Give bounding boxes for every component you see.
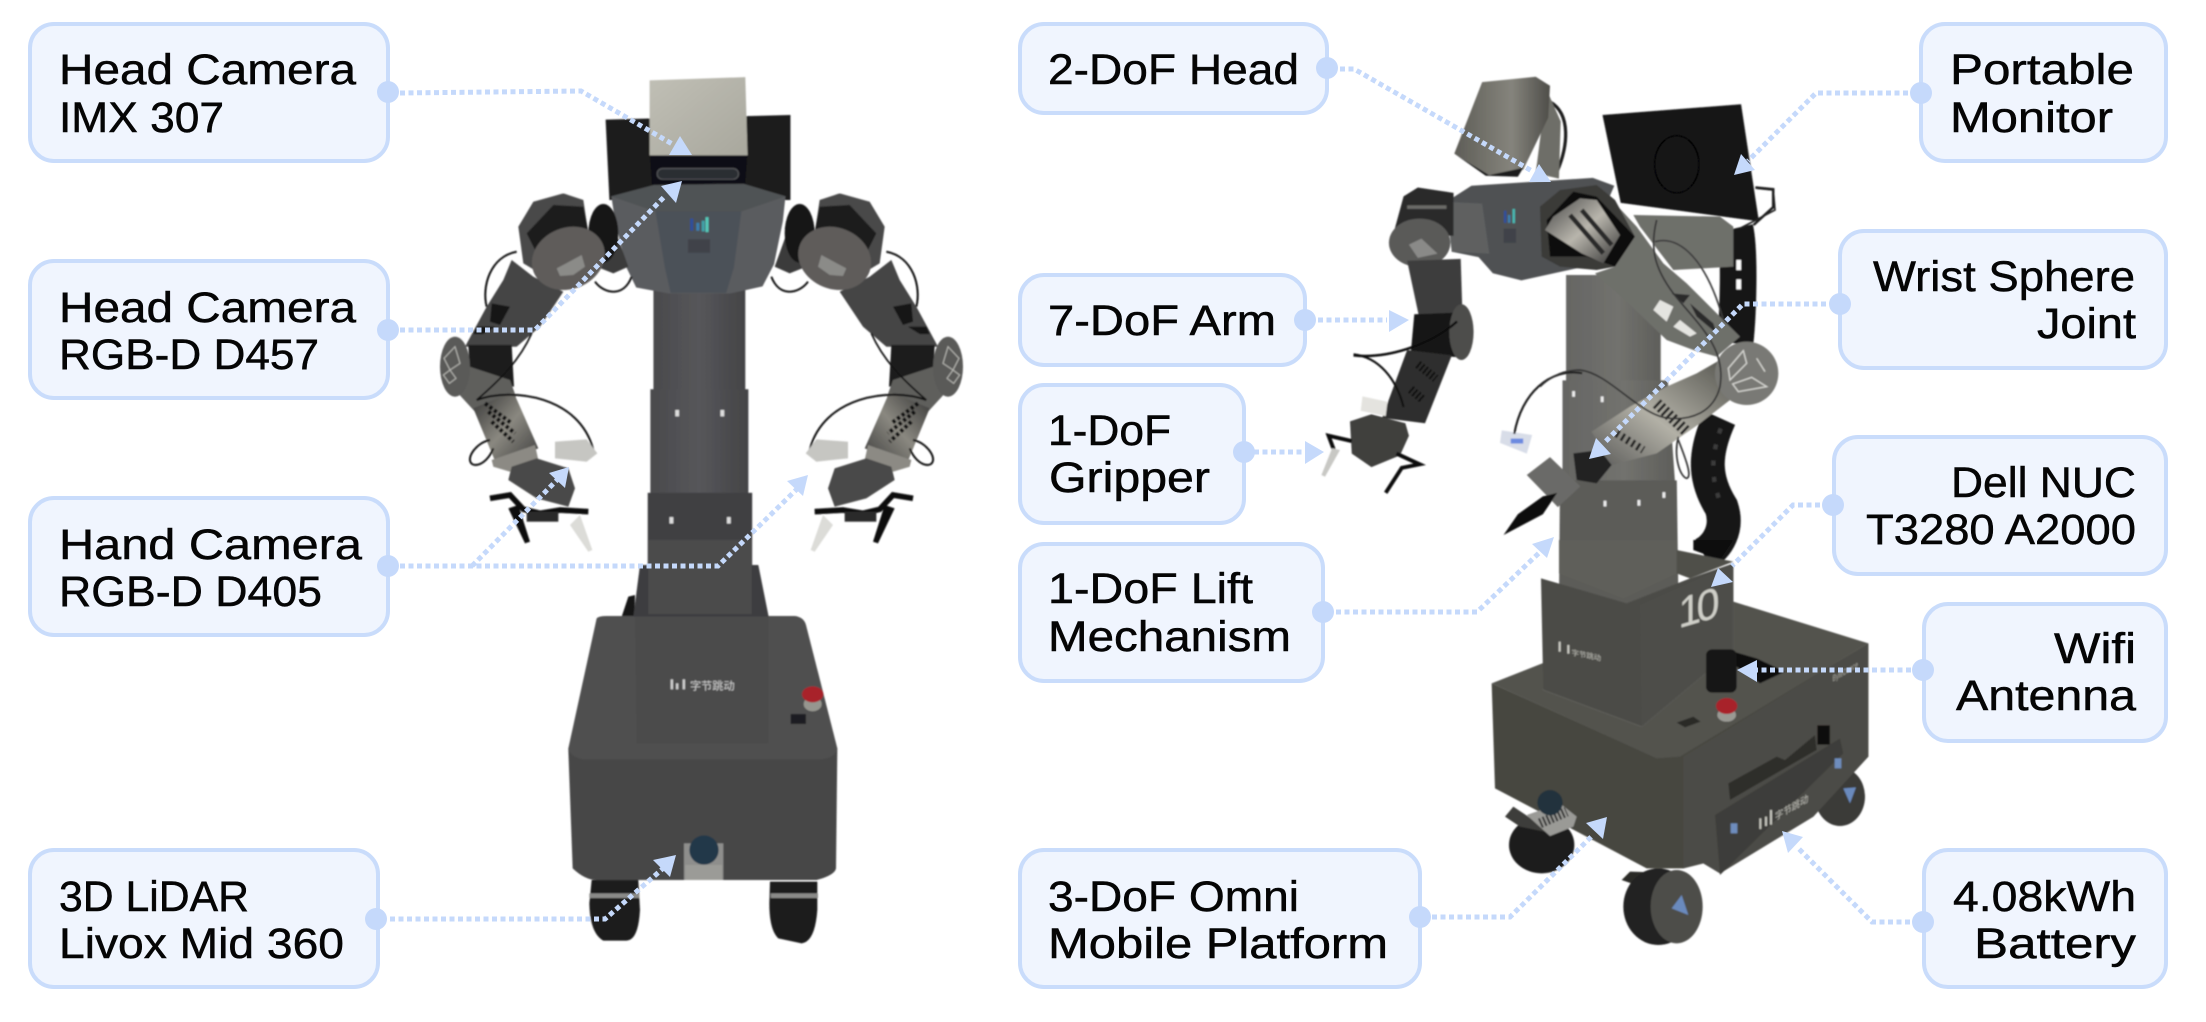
- label: Head Camera IMX 307: IMX 307: [59, 94, 224, 142]
- connector: Portable Monitor: [1734, 93, 1908, 175]
- robot: front view: [440, 77, 963, 943]
- connector: Hand Camera RGB-D D405: [400, 467, 808, 566]
- tower: 字节跳动: [1572, 648, 1601, 663]
- gripper jaws: [490, 495, 588, 513]
- label: 3-DoF Omni Mobile Platform: Mobile Platform: [1048, 920, 1388, 968]
- connector: Battery: [1782, 831, 1910, 922]
- arm cables: [1540, 188, 1775, 478]
- tower: [1541, 540, 1733, 727]
- head camera housing: [650, 77, 748, 187]
- gripper body: [508, 458, 575, 507]
- label: 7-DoF Arm: [1020, 275, 1316, 365]
- connector: 3-DoF Omni: [1432, 817, 1607, 917]
- label: 4.08kWh Battery: 4.08kWh: [1953, 873, 2136, 921]
- label: Head Camera IMX 307: [30, 24, 399, 161]
- tower: 10: [1678, 578, 1719, 638]
- front view base: [568, 540, 837, 943]
- connector: 3D LiDAR: [390, 855, 676, 919]
- label: Wrist Sphere Joint: Joint: [2037, 300, 2136, 348]
- connector: 2-DoF Head: [1340, 69, 1551, 182]
- left wheel and LiDAR: [1505, 790, 1577, 873]
- connector: Head Camera RGB-D D457: [400, 181, 682, 330]
- label: Portable Monitor: [1910, 24, 2166, 161]
- chain: [1693, 540, 1733, 560]
- battery: [1715, 738, 1843, 875]
- e-stop: [791, 686, 823, 724]
- label: 2-DoF Head: 2-DoF Head: [1048, 46, 1299, 94]
- label: Hand Camera RGB-D D405: Hand Camera: [59, 521, 362, 569]
- label: Dell NUC T3280 A2000: T3280 A2000: [1866, 506, 2136, 554]
- robot: three-quarter view: [1321, 77, 1868, 945]
- label: 1-DoF Lift Mechanism: Mechanism: [1048, 613, 1291, 661]
- label: 3-DoF Omni Mobile Platform: 3-DoF Omni: [1048, 873, 1299, 921]
- label: 1-DoF Lift Mechanism: [1020, 544, 1334, 681]
- label: Head Camera RGB-D D457: [30, 261, 399, 398]
- three-quarter upper body: [1321, 77, 1773, 610]
- lift column: [648, 286, 752, 610]
- rear wheel: [1815, 767, 1865, 826]
- label: 4.08kWh Battery: Battery: [1974, 920, 2137, 968]
- label: Portable Monitor: Monitor: [1950, 94, 2113, 142]
- label: 1-DoF Lift Mechanism: 1-DoF Lift: [1048, 565, 1253, 613]
- lift column: [1559, 275, 1679, 610]
- connector: 1-DoF Gripper: [1254, 441, 1324, 464]
- label: 1-DoF Gripper: [1020, 385, 1255, 523]
- far arm: [1321, 187, 1474, 493]
- battery: 字节跳动: [1775, 792, 1808, 824]
- connector: Dell NUC: [1711, 505, 1820, 587]
- left arm: [440, 193, 632, 552]
- label: 1-DoF Gripper: 1-DoF: [1048, 407, 1171, 455]
- monitor back: [606, 115, 790, 200]
- logo: 字节跳动: [690, 678, 735, 692]
- forearm: [1592, 360, 1730, 465]
- rear wheels: [589, 880, 818, 943]
- connector: 7-DoF Arm: [1318, 310, 1409, 332]
- near arm: [1540, 185, 1778, 483]
- monitor: [1602, 104, 1773, 225]
- label: 7-DoF Arm: 7-DoF Arm: [1048, 297, 1276, 345]
- label: 3D LiDAR Livox Mid 360: [30, 850, 387, 987]
- label: Hand Camera RGB-D D405: [30, 498, 399, 635]
- shoulder drum: [1540, 185, 1635, 270]
- lower cable chain: [1704, 418, 1724, 554]
- forearm: [473, 392, 538, 465]
- base body: [1492, 643, 1868, 873]
- upper arm: [465, 260, 563, 347]
- label: Hand Camera RGB-D D405: RGB-D D405: [59, 568, 322, 616]
- hand camera: [555, 439, 597, 462]
- connector: Wifi Antenna: [1737, 660, 1911, 682]
- right arm: [771, 193, 963, 552]
- connector: 1-DoF Lift: [1336, 537, 1554, 612]
- label: Head Camera RGB-D D457: Head Camera: [59, 284, 356, 332]
- wrist sphere joint: [1715, 342, 1778, 405]
- connector: Head Camera IMX 307: [400, 91, 692, 155]
- base body: [568, 748, 837, 880]
- label: Portable Monitor: Portable: [1950, 46, 2134, 94]
- LiDAR: [684, 835, 723, 880]
- brand label: ByteDance: [1833, 659, 1858, 684]
- front view upper body: [606, 77, 790, 610]
- head: [1454, 77, 1566, 179]
- vent and antenna: [1706, 649, 1785, 693]
- e-stop: [1677, 698, 1737, 727]
- connector: Wrist Sphere Joint: [1589, 304, 1826, 459]
- upper arm link: [1595, 187, 1740, 357]
- logo: [671, 678, 735, 692]
- label: 1-DoF Gripper: Gripper: [1049, 454, 1210, 502]
- label: Wrist Sphere Joint: Wrist Sphere: [1873, 253, 2135, 301]
- tower: [635, 617, 768, 743]
- label: 3-DoF Omni Mobile Platform: [1020, 850, 1431, 987]
- three-quarter base: [1492, 540, 1868, 945]
- label: Wrist Sphere Joint: [1829, 231, 2166, 368]
- grill: [1728, 735, 1817, 800]
- torso: [1446, 178, 1614, 280]
- label: 3D LiDAR Livox Mid 360: Livox Mid 360: [59, 920, 344, 968]
- label: Head Camera IMX 307: Head Camera: [59, 46, 356, 94]
- near gripper: [1500, 372, 1582, 535]
- shoulder link: [597, 207, 628, 273]
- label: Dell NUC T3280 A2000: Dell NUC: [1951, 459, 2136, 507]
- label: 3D LiDAR Livox Mid 360: 3D LiDAR: [59, 873, 249, 921]
- label: Head Camera RGB-D D457: RGB-D D457: [59, 331, 319, 379]
- label: Wifi Antenna: Wifi: [2054, 625, 2136, 673]
- chain and antenna: [612, 595, 635, 670]
- shoulder drum: [518, 193, 588, 273]
- label: Dell NUC T3280 A2000: [1822, 437, 2166, 574]
- label: 4.08kWh Battery: [1912, 850, 2166, 987]
- label: Wifi Antenna: [1912, 604, 2166, 741]
- label: Wifi Antenna: Antenna: [1956, 672, 2136, 720]
- torso: [611, 184, 785, 294]
- upper cable chain: [1735, 228, 1739, 343]
- label: 2-DoF Head: [1020, 24, 1338, 113]
- elbow: [468, 345, 514, 387]
- front wheel: [1622, 868, 1703, 945]
- shelf: [1633, 215, 1733, 270]
